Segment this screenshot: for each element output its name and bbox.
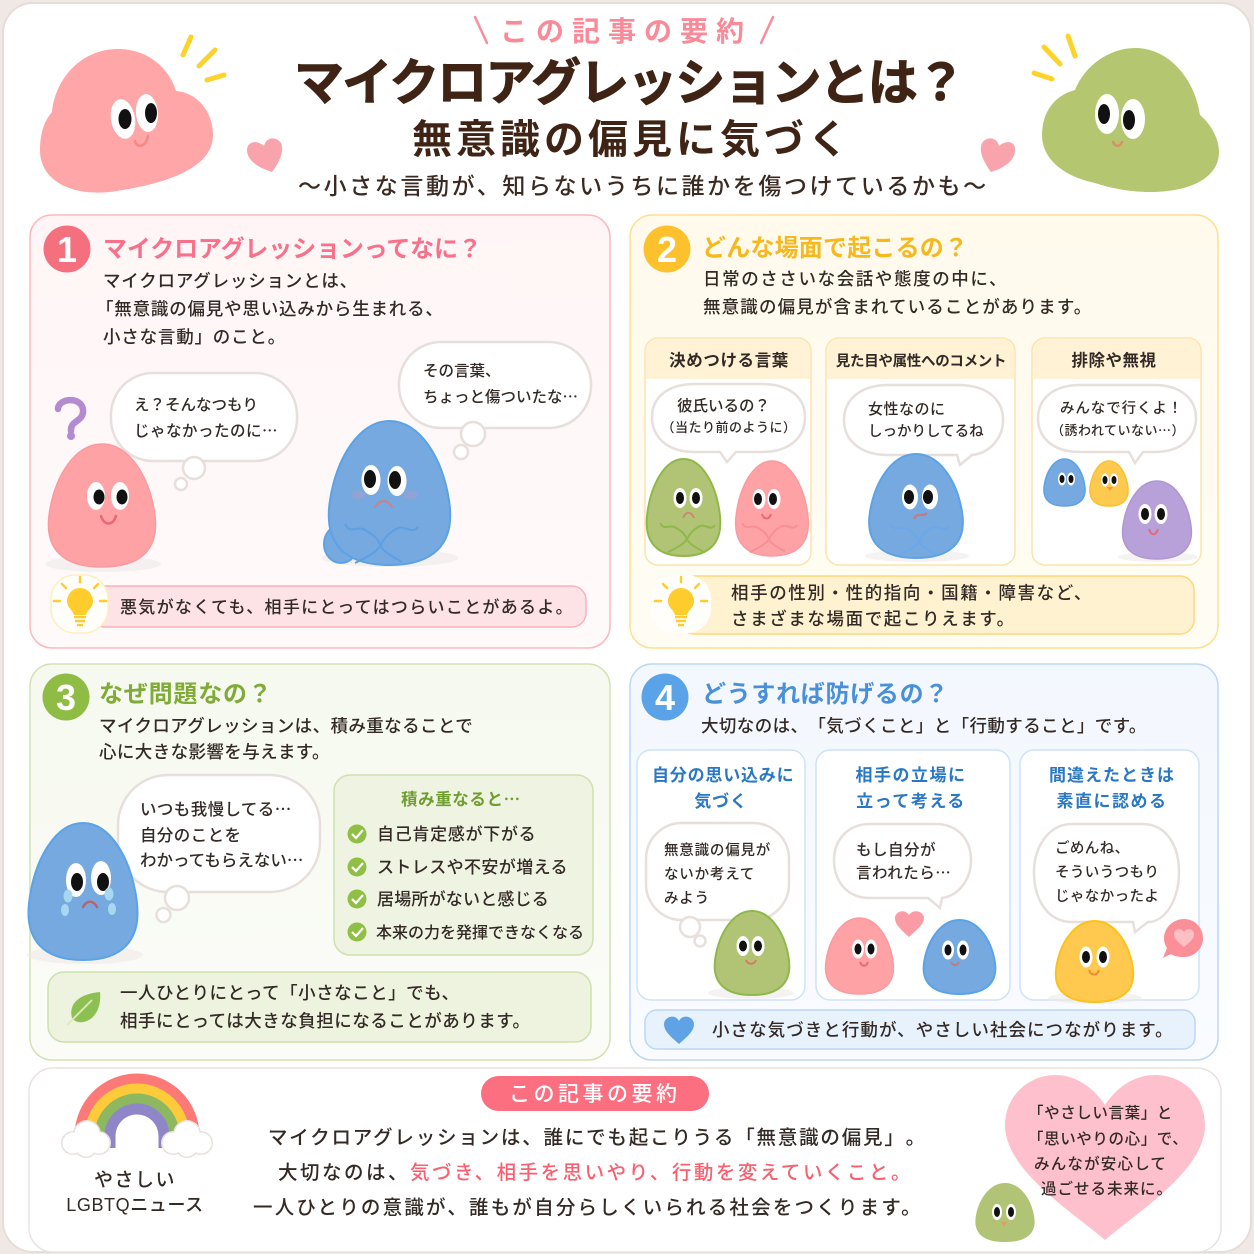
header [294, 16, 989, 199]
summary text: 一人ひとりの意識が、誰もが自分らしくいられる社会をつくります。 [253, 1197, 923, 1219]
speech bubble [834, 824, 971, 908]
icon: heart right [981, 138, 1015, 172]
thought bubble: みよう [664, 890, 710, 907]
card: comments on looks: 見た目や属性へのコメント [836, 353, 1006, 370]
body 1 [96, 271, 444, 347]
thought bubble: blue: ちょっと傷ついたな… [423, 385, 578, 407]
card: notice assumptions: 気づく [694, 792, 748, 811]
card: comments on looks [826, 338, 1015, 565]
character: pink blob [736, 461, 808, 556]
icon: blue heart [664, 1017, 694, 1044]
speech bubble: 彼氏いるの？ [677, 397, 770, 415]
check item 3: 居場所がないと感じる [377, 889, 549, 909]
card: exclusion: 排除や無視 [1072, 351, 1156, 370]
speech bubble: もし自分が [856, 840, 936, 859]
card: notice assumptions [637, 750, 805, 1000]
card: admit mistakes [1020, 750, 1203, 1004]
tip bar 1 [51, 575, 586, 633]
tagline: 〜小さな言動が、知らないうちに誰かを傷つけているかも〜 [298, 173, 989, 199]
thought bubble: 自分のことを [140, 826, 241, 845]
icon: heart left [247, 138, 282, 172]
check item 2: ストレスや不安が増える [377, 857, 568, 877]
speech bubble [1034, 824, 1179, 932]
heart callout [1005, 1075, 1205, 1240]
icon: light bulb [651, 575, 711, 633]
icon: green cloud character [1042, 48, 1219, 192]
speech bubble: （当たり前のように） [661, 420, 797, 435]
body 2 [703, 269, 1092, 317]
heart callout: みんなが安心して [1034, 1154, 1167, 1173]
icon: yellow sparks right [1034, 36, 1075, 79]
icon: pink cloud character [40, 49, 213, 193]
icon: question mark [58, 400, 83, 440]
panel 4: how to prevent [630, 664, 1218, 1060]
icon: heart chat bubble [1163, 919, 1203, 958]
badge 1: 1 [57, 229, 77, 270]
logo text: LGBTQニュース [66, 1195, 204, 1215]
character: blue blob [924, 920, 995, 994]
speech bubble: 女性なのに [868, 401, 946, 418]
thought bubble: 無意識の偏見が [664, 841, 771, 859]
speech bubble [1038, 385, 1196, 463]
character: yellow blob [1048, 921, 1142, 1004]
speech bubble: しっかりしてるね [868, 423, 984, 440]
message bar 4: 小さな気づきと行動が、やさしい社会につながります。 [712, 1020, 1174, 1040]
title: マイクロアグレッションとは？ [294, 55, 964, 111]
thought bubble [646, 823, 789, 946]
summary text [253, 1127, 927, 1219]
tip bar 1: 悪気がなくても、相手にとってはつらいことがあるよ。 [120, 597, 574, 617]
badge 1 [44, 226, 90, 272]
speech bubble [844, 385, 1003, 465]
thought bubble: blue [399, 342, 591, 459]
character: purple blob [1118, 481, 1198, 562]
card: admit mistakes: 素直に認める [1056, 792, 1168, 811]
tip bar 2: 相手の性別・性的指向・国籍・障害など、 [731, 583, 1093, 603]
body 3: マイクロアグレッションは、積み重なることで [99, 716, 473, 736]
check item 4: 本来の力を発揮できなくなる [376, 924, 584, 942]
box: accumulation effects: 積み重なると… [401, 786, 521, 810]
card: others' perspective: 相手の立場に [856, 765, 966, 785]
kicker: この記事の要約: この記事の要約 [500, 16, 752, 47]
thought bubble: pink: え？そんなつもり [134, 396, 258, 414]
body 4: 大切なのは、「気づくこと」と「行動すること」です。 [701, 716, 1147, 736]
character: small green blob [975, 1183, 1035, 1242]
logo text: やさしい [94, 1169, 176, 1191]
character: pink blob [826, 918, 893, 994]
pill: summary label: この記事の要約 [509, 1083, 680, 1106]
character: green blob [708, 911, 794, 999]
card: others' perspective: 立って考える [856, 792, 966, 811]
message bar 4 [645, 1010, 1195, 1049]
thought bubble: pink [111, 373, 297, 490]
panel 3: why it matters [27, 664, 610, 1060]
subtitle: 無意識の偏見に気づく [412, 118, 852, 162]
card: others' perspective [816, 750, 1010, 1000]
character: crying blue blob [27, 823, 143, 964]
character: small blue blob [1044, 459, 1085, 506]
speech bubble: そういうつもり [1055, 864, 1159, 881]
icon: light bulb [51, 575, 108, 633]
speech bubble: みんなで行くよ！ [1060, 400, 1183, 417]
heart callout: 過ごせる未来に。 [1041, 1180, 1173, 1198]
logo text [66, 1169, 204, 1215]
speech bubble: （誘われていない…） [1051, 420, 1185, 439]
card: exclusion [1032, 338, 1201, 565]
badge 4 [642, 674, 688, 720]
icon: rainbow [61, 1079, 213, 1158]
character: blue blob hugging itself [322, 421, 458, 567]
tip bar 3: 一人ひとりにとって「小さなこと」でも、 [120, 983, 460, 1003]
heart callout: 「やさしい言葉」と [1028, 1104, 1173, 1122]
thought bubble: blue: その言葉、 [423, 362, 501, 380]
box: accumulation effects [334, 775, 593, 955]
check item 1: 自己肯定感が下がる [377, 824, 536, 844]
tip bar 2: さまざまな場面で起こりえます。 [731, 609, 1016, 629]
tip bar 3: 相手にとっては大きな負担になることがあります。 [120, 1011, 530, 1031]
card: labeling words [645, 338, 811, 565]
speech bubble: じゃなかったよ [1055, 888, 1159, 905]
summary text: マイクロアグレッションは、誰にでも起こりうる「無意識の偏見」。 [268, 1127, 927, 1149]
body 3 [99, 716, 473, 762]
card: labeling words: 決めつける言葉 [669, 351, 789, 370]
thought bubble: ないか考えて [664, 866, 755, 883]
body 1: 「無意識の偏見や思い込みから生まれる、 [96, 299, 444, 319]
icon: leaf [67, 992, 100, 1025]
icon: yellow sparks left [183, 37, 224, 80]
thought bubble: pink: じゃなかったのに… [134, 419, 278, 441]
character: green blob [647, 459, 720, 556]
tip bar 3 [48, 972, 591, 1042]
panel 2: when it happens [630, 215, 1218, 648]
heading 3: なぜ問題なの？ [99, 681, 273, 708]
pill: summary label [481, 1076, 709, 1111]
card: notice assumptions: 自分の思い込みに [652, 765, 794, 785]
badge 3: 3 [56, 677, 76, 718]
thought bubble: いつも我慢してる… [140, 796, 292, 820]
character: pink blob [45, 444, 161, 572]
character: small yellow blob [1090, 461, 1128, 506]
speech bubble: 言われたら… [856, 861, 951, 883]
heading 2: どんな場面で起こるの？ [702, 235, 968, 262]
panel: bottom summary [29, 1068, 1221, 1252]
body 2: 日常のささいな会話や態度の中に、 [703, 269, 1008, 289]
tip bar 2 [651, 575, 1194, 634]
body 1: 小さな言動」のこと。 [103, 327, 286, 347]
thought bubble: わかってもらえない… [140, 847, 303, 871]
thought bubble [118, 775, 320, 922]
badge 3 [42, 674, 90, 720]
body 1: マイクロアグレッションとは、 [103, 271, 358, 291]
speech bubble: ごめんね、 [1055, 839, 1130, 857]
body 2: 無意識の偏見が含まれていることがあります。 [703, 297, 1092, 317]
speech bubble [652, 384, 805, 462]
heading 4: どうすれば防げるの？ [702, 681, 949, 708]
badge 2: 2 [657, 229, 677, 270]
summary text: 大切なのは、気づき、相手を思いやり、行動を変えていくこと。 [278, 1162, 913, 1184]
heading 1: マイクロアグレッションってなに？ [103, 235, 482, 263]
badge 2 [644, 226, 690, 272]
character: blue blob [865, 454, 969, 562]
panel 1: what is it [30, 215, 610, 648]
badge 4: 4 [655, 677, 675, 718]
card: admit mistakes: 間違えたときは [1049, 765, 1175, 785]
icon: heart [895, 911, 924, 937]
body 3: 心に大きな影響を与えます。 [99, 742, 330, 762]
heart callout: 「思いやりの心」で、 [1028, 1130, 1188, 1148]
